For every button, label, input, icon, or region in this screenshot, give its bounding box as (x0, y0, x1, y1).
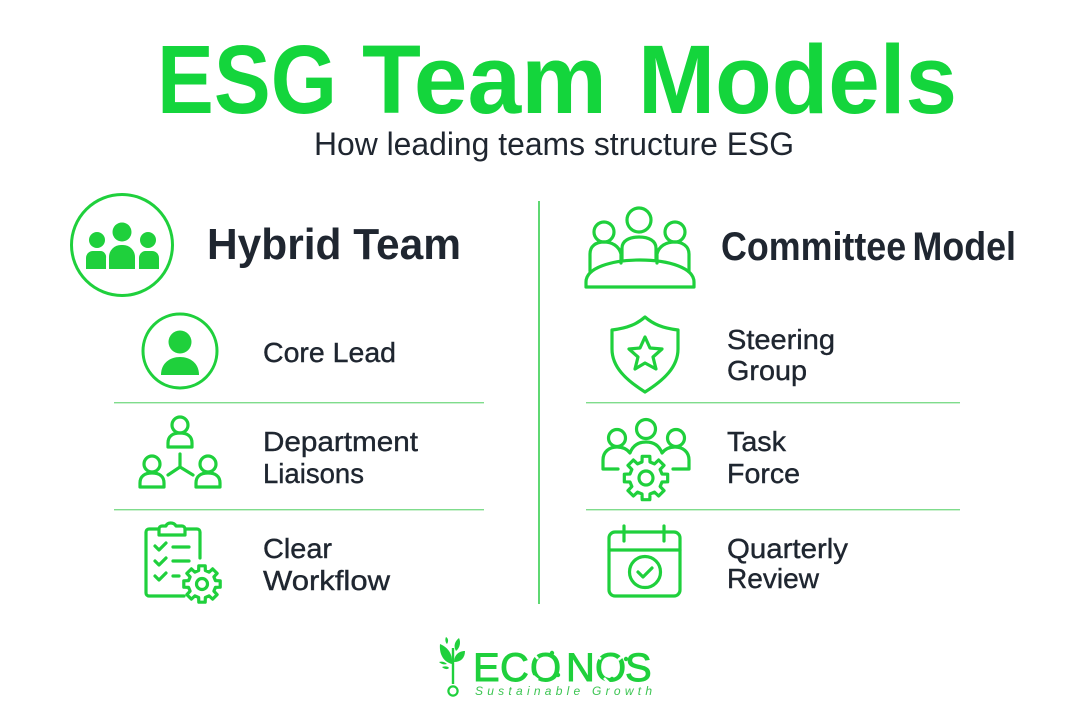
logo: econos (439, 637, 652, 698)
row: core lead (143, 314, 396, 388)
heading: committee model: Committee Model (721, 225, 1016, 269)
row: department liaisons: Liaisons (263, 458, 364, 489)
row: clear workflow (146, 523, 391, 602)
title: Models (638, 25, 957, 134)
title: ESG (157, 25, 337, 134)
row: steering group: Group (727, 355, 807, 386)
label: steering group: Steering (727, 324, 835, 355)
row: task force (603, 420, 800, 500)
icon: calendar with check (609, 526, 680, 596)
icon: sprout (439, 637, 465, 696)
heading: hybrid team: Hybrid Team (207, 220, 461, 269)
center divider (538, 201, 540, 604)
label: quarterly review: Quarterly (727, 533, 848, 564)
row: clear workflow: Workflow (263, 565, 391, 596)
row: task force: Force (727, 458, 800, 489)
icon: people with gear (603, 420, 689, 500)
subtitle: How leading teams structure ESG (314, 126, 794, 162)
icon: connected people (140, 417, 220, 487)
row: quarterly review: Review (727, 563, 820, 594)
label: core lead: Core Lead (263, 337, 396, 368)
label: department liaisons: Department (263, 426, 418, 457)
logo wordmark: ECONOS (473, 646, 652, 690)
panel: hybrid team (72, 194, 484, 602)
row: department liaisons (140, 417, 418, 489)
panel: committee model (586, 208, 1016, 596)
title (157, 25, 957, 134)
icon: shield with star (612, 317, 678, 392)
row: steering group (612, 317, 835, 392)
label: clear workflow: Clear (263, 533, 332, 564)
logo tagline: Sustainable Growth (475, 684, 652, 698)
label: task force: Task (727, 426, 787, 457)
icon: clipboard with gear (146, 523, 220, 602)
icon: committee table (586, 208, 694, 287)
icon: hybrid team group (72, 194, 172, 296)
row: quarterly review (609, 526, 848, 596)
icon: core lead person (143, 314, 217, 388)
title: Team (362, 25, 607, 134)
